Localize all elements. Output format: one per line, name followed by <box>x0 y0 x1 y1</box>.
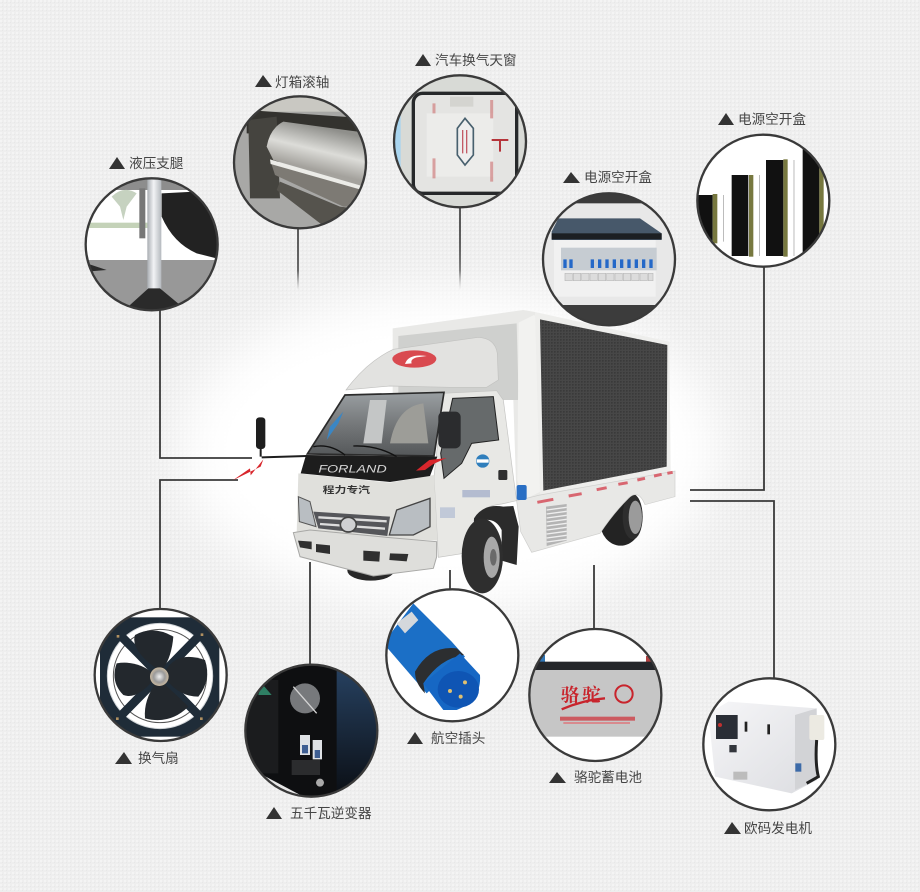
box lower skirt <box>517 471 675 552</box>
connector: aviation plug to truck <box>449 570 451 590</box>
front bumper <box>293 530 437 576</box>
truck box front face <box>393 310 541 503</box>
photo circle: hydraulic leg <box>80 177 223 313</box>
label: aviation plug: 航空插头 <box>431 731 485 746</box>
truck illustration <box>233 310 675 593</box>
cab door <box>434 391 517 557</box>
photo circle: ventilation fan <box>93 607 228 743</box>
LED screen <box>540 319 667 491</box>
connector: light box roller to truck <box>297 228 299 290</box>
label: light box roller <box>255 74 329 90</box>
connector: ventilation fan to truck <box>160 480 238 609</box>
photo circle: camel battery: 骆驼 <box>561 686 601 707</box>
soft white glow behind truck <box>180 290 720 610</box>
label: power switch box 1: 电源空开盒 <box>584 169 652 185</box>
red ribbons <box>233 458 447 480</box>
label: hydraulic leg: 液压支腿 <box>129 156 184 171</box>
photo circle: camel battery <box>527 627 665 763</box>
connector: sunroof to truck <box>459 207 461 290</box>
photo circle: speaker columns <box>695 133 832 270</box>
black hood band <box>301 455 437 482</box>
label: ventilation fan <box>115 751 179 766</box>
near side mirror <box>438 412 461 448</box>
label: camel battery <box>549 769 642 785</box>
label: power switch box 2: 电源空开盒 <box>738 111 806 127</box>
side vent louver <box>546 504 567 546</box>
wheel arch <box>474 506 519 565</box>
side window <box>441 397 499 478</box>
photo circle: euro generator <box>702 677 837 813</box>
photo circle: light box roller <box>230 93 370 233</box>
door details <box>440 454 527 518</box>
connector: hydraulic leg to truck <box>160 310 252 458</box>
photo circle: power switch box 1 <box>540 190 680 330</box>
right headlight <box>389 498 430 535</box>
label: camel battery: 骆驼蓄电池 <box>574 769 642 785</box>
connector: battery to truck <box>593 565 595 630</box>
photo circle: vehicle sunroof <box>390 73 530 210</box>
red reflector marks <box>537 472 673 502</box>
box side frame <box>535 312 671 497</box>
cab roof deflector <box>346 337 498 390</box>
label: aviation plug <box>407 731 485 746</box>
photo circle: 5kW inverter <box>243 663 380 800</box>
photo circle: aviation plug <box>383 587 522 723</box>
front wheel <box>462 519 503 593</box>
connector: generator to truck <box>690 501 774 678</box>
label: vehicle sunroof: 汽车换气天窗 <box>435 52 517 68</box>
connector: inverter to truck <box>309 562 311 665</box>
label: ventilation fan: 换气扇 <box>138 751 179 766</box>
connector: power switch box 2 to truck <box>690 266 764 490</box>
left headlight <box>298 497 316 527</box>
far side mirror <box>256 417 307 457</box>
label: euro generator: 欧码发电机 <box>744 821 812 836</box>
underside chassis <box>347 561 394 581</box>
cab front panel <box>297 473 437 541</box>
grille <box>313 512 390 536</box>
brand mark: 程力专汽 <box>323 484 370 495</box>
label: light box roller: 灯箱滚轴 <box>275 74 329 90</box>
label: 5kW inverter: 五千瓦逆变器 <box>290 806 372 821</box>
brand name FORLAND: FORLAND <box>318 464 387 476</box>
windshield <box>307 392 444 457</box>
rear wheel <box>600 494 643 546</box>
red roof logo <box>392 350 436 368</box>
